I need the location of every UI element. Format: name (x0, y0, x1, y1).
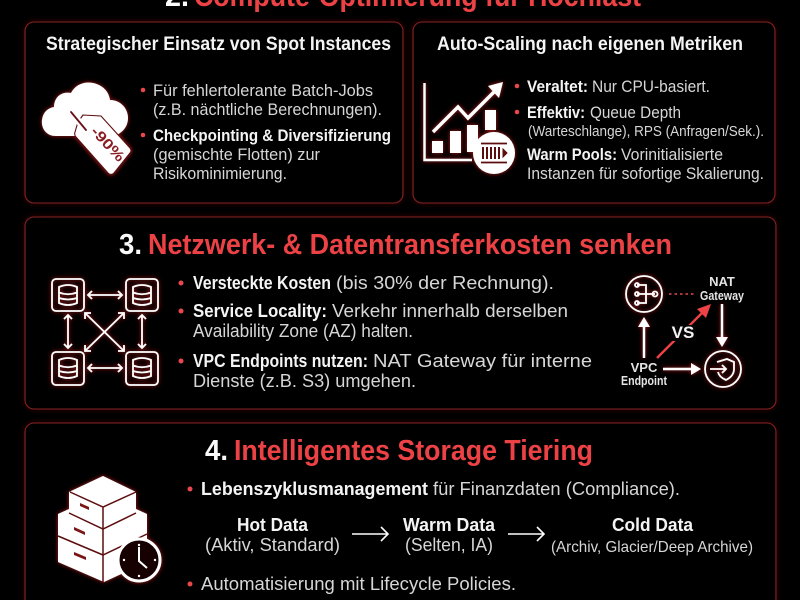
label: NAT Gateway (700, 274, 745, 303)
bullet list: auto-scaling: Effektiv: (527, 104, 585, 122)
bullet list: auto-scaling: Queue Depth (590, 104, 681, 122)
bullet list: network: NAT Gateway für interne (373, 350, 592, 371)
tier: cold data: (Archiv, Glacier/Deep Archive) (551, 539, 753, 556)
bullet list: auto-scaling: Vorinitialisierte (621, 146, 723, 164)
bullet list: spot instances: Für fehlertolerante Batch-Jobs (153, 82, 373, 100)
arrow: warm to cold (508, 527, 544, 541)
label: NAT Gateway: NAT (709, 274, 735, 289)
panel: auto-scaling (413, 22, 775, 203)
tier: warm data (403, 514, 496, 555)
arrow: NAT to shield (716, 304, 728, 347)
tier: warm data: Warm Data (403, 514, 496, 535)
bullet list: spot instances: Checkpointing & Diversifizierung (153, 127, 391, 145)
bullet list: network: Availability Zone (AZ) halten. (193, 320, 413, 341)
tier: hot data (205, 514, 340, 555)
arrow: endpoint up (638, 317, 650, 358)
label: VPC Endpoint (621, 360, 668, 388)
bullet list: spot instances: (z.B. nächtliche Berechnungen). (153, 101, 382, 119)
diagram: VPC endpoint vs NAT gateway (621, 274, 745, 388)
icon: service hub (626, 276, 662, 312)
bullet list: network: Versteckte Kosten (193, 272, 331, 293)
bullet list: spot instances (141, 82, 391, 183)
bullet: automation: Automatisierung mit Lifecycle Policies. (201, 573, 516, 594)
bullet list: network: Verkehr innerhalb derselben (332, 300, 568, 321)
label: VPC Endpoint: VPC (631, 360, 658, 375)
label: VPC Endpoint: Endpoint (621, 373, 668, 388)
arrow: red diagonal (657, 304, 711, 358)
bullet list: spot instances: Risikominimierung. (153, 165, 287, 183)
heading: section 3: 3. (119, 229, 142, 261)
bullet: lifecycle management (188, 478, 680, 499)
bullet: lifecycle management: für Finanzdaten (Compliance). (433, 478, 680, 499)
label: VS: VS (672, 323, 694, 342)
bullet list: network: Dienste (z.B. S3) umgehen. (193, 370, 416, 391)
bullet list: auto-scaling: Nur CPU-basiert. (592, 78, 710, 96)
label: NAT Gateway: Gateway (700, 288, 745, 303)
bullet list: spot instances: (gemischte Flotten) zur (153, 146, 320, 164)
tier: hot data: (Aktiv, Standard) (205, 534, 340, 555)
heading: section 4: 4. (205, 435, 228, 467)
card heading: spot instances: Strategischer Einsatz von Spot Instances (46, 34, 391, 55)
card heading: auto-scaling: Auto-Scaling nach eigenen Metriken (437, 34, 743, 55)
bullet list: network: Service Locality: (193, 300, 327, 321)
icon: database mesh (52, 279, 158, 385)
tier: hot data: Hot Data (237, 514, 309, 535)
bullet list: auto-scaling: Veraltet: (527, 78, 588, 96)
tier: cold data: Cold Data (612, 514, 694, 535)
heading: section 3: Netzwerk- & Datentransferkosten senken (148, 229, 672, 261)
bullet list: auto-scaling: Warm Pools: (527, 146, 617, 164)
icon: shield with arrow (705, 351, 741, 387)
dotted link (669, 293, 694, 295)
bullet list: network: (bis 30% der Rechnung). (336, 272, 554, 293)
panel: storage tiering (25, 423, 776, 600)
tier: warm data: (Selten, IA) (405, 534, 493, 555)
icon: stacked boxes with clock (58, 476, 160, 582)
icon: cloud with price tag: -90% (87, 124, 128, 166)
arrow: endpoint right (663, 363, 701, 375)
bullet list: auto-scaling (515, 78, 764, 183)
icon: growth chart with queue (424, 82, 515, 174)
heading: section 4: Intelligentes Storage Tiering (234, 435, 593, 467)
tier: cold data (551, 514, 753, 556)
panel: network costs (25, 217, 776, 409)
icon: cloud with price tag (42, 82, 131, 174)
arrow: hot to warm (352, 527, 388, 541)
bullet list: auto-scaling: Instanzen für sofortige Skalierung. (527, 165, 764, 183)
bullet list: auto-scaling: (Warteschlange), RPS (Anfragen/Sek.). (528, 124, 764, 140)
bullet: lifecycle management: Lebenszyklusmanagement (201, 478, 428, 499)
bullet list: network: VPC Endpoints nutzen: (193, 350, 368, 371)
bullet list: network (178, 272, 592, 391)
panel: spot instances (25, 22, 403, 203)
